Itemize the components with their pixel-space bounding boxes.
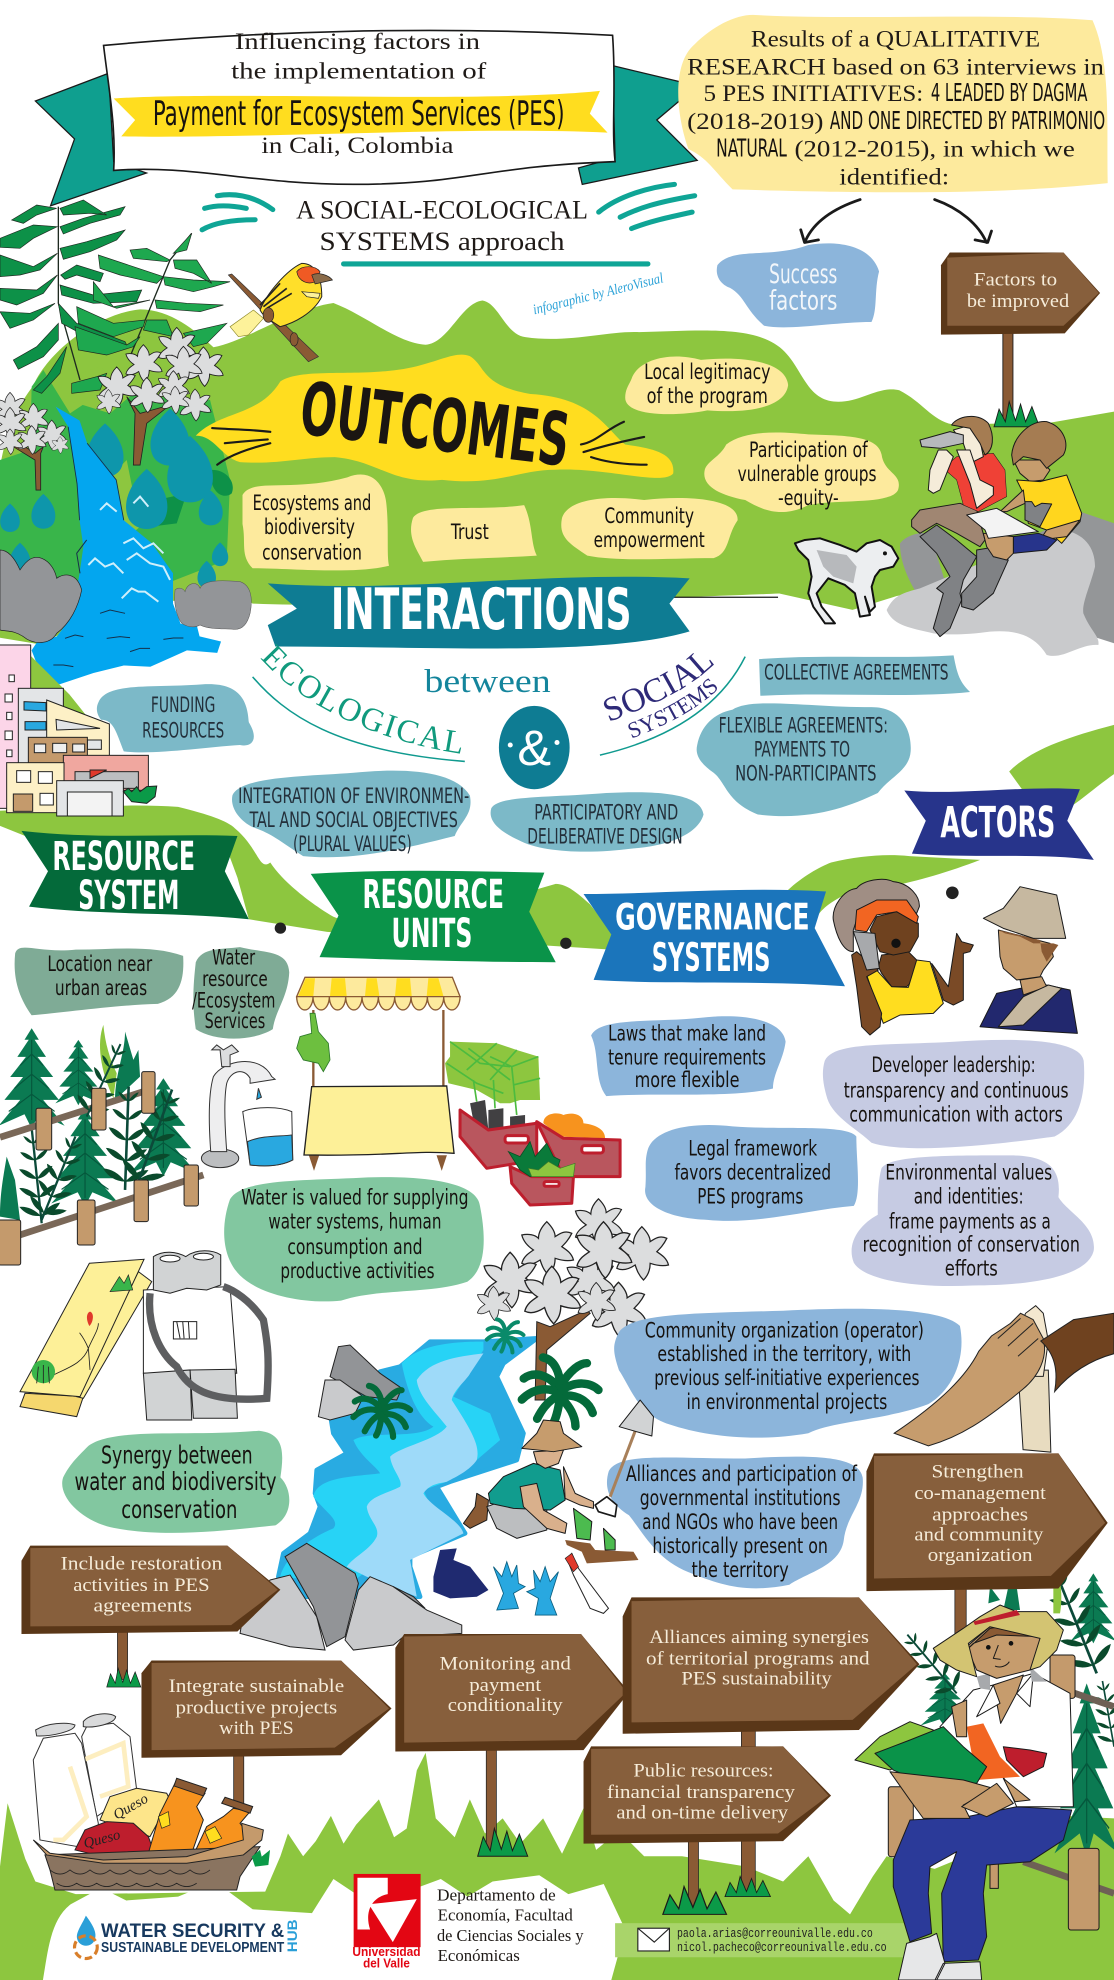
outcome: community empowerment: Community	[604, 504, 694, 529]
outcome: ecosystems: Ecosystems and	[253, 491, 371, 516]
factor: environmental values: frame payments as a	[889, 1210, 1051, 1235]
outcome: participation: Participation of	[749, 438, 869, 463]
waterfall scene: trees, water and rocks	[0, 200, 251, 684]
factor: water resource: resource	[202, 967, 268, 992]
sign: alliances aiming	[623, 1597, 919, 1890]
study description panel: (2012-2015), in which we	[794, 137, 1075, 163]
map	[20, 1259, 152, 1417]
mound behind buildings	[25, 650, 114, 821]
outcomes blob: OUTCOMES	[296, 367, 574, 484]
outcome: trust	[411, 505, 537, 562]
factor: synergy: water and biodiversity	[75, 1467, 277, 1496]
sign: include restoration: activities in PES	[73, 1575, 210, 1596]
factor: legal framework: favors decentralized	[674, 1160, 831, 1185]
interaction: flexible agreements: PAYMENTS TO	[754, 737, 850, 762]
department text: Economía, Facultad	[438, 1906, 573, 1925]
interaction: integration: INTEGRATION OF ENVIRONMEN-	[238, 784, 469, 809]
interaction: funding resources: FUNDING	[151, 693, 215, 718]
outcome: community empowerment	[561, 498, 738, 559]
dark branches	[11, 1037, 193, 1227]
scene: white flowers	[0, 327, 223, 454]
alliances blob: Alliances and participation of	[626, 1462, 858, 1487]
title banner: in Cali, Colombia	[261, 133, 454, 159]
actor: man with hat	[980, 887, 1077, 1033]
child reading	[967, 422, 1082, 560]
trunk	[535, 1310, 590, 1400]
grey hair	[977, 1667, 1047, 1690]
soil and sprouts	[565, 1540, 638, 1563]
sign: public resources: and on-time delivery	[616, 1802, 789, 1823]
rock	[887, 512, 1114, 656]
knife	[565, 1553, 608, 1613]
contact emails: paola.arias@correounivalle.edu.co	[677, 1926, 873, 1941]
factor: water valued: productive activities	[280, 1259, 434, 1284]
study description panel: 5 PES INITIATIVES:	[704, 81, 923, 107]
community organization blob	[614, 1309, 962, 1438]
department text: Económicas	[438, 1946, 520, 1965]
monstera	[353, 1386, 410, 1437]
pants	[893, 1807, 1072, 1962]
sign: alliances aiming: PES sustainability	[681, 1669, 832, 1690]
interaction: funding resources	[97, 684, 254, 752]
factor: legal framework	[645, 1125, 858, 1221]
factor: water valued	[224, 1177, 484, 1301]
study description panel: identified:	[839, 164, 949, 190]
factor: environmental values: Environmental values	[885, 1160, 1052, 1185]
factor: developer leadership	[823, 1040, 1084, 1148]
arrow: to success factors	[801, 200, 860, 242]
factor: environmental values: and identities:	[914, 1184, 1024, 1209]
sign: strengthen: organization	[928, 1545, 1033, 1566]
factor: environmental values: efforts	[945, 1256, 998, 1281]
orange squash and peppers	[967, 1723, 1020, 1780]
sign: strengthen: co-management	[914, 1483, 1047, 1504]
right ferns behind farmer	[894, 1560, 1114, 1858]
face	[967, 1627, 1042, 1678]
contact emails	[615, 1923, 909, 1957]
department text: de Ciencias Sociales y	[437, 1926, 584, 1945]
basket with products	[33, 1714, 270, 1890]
interactions banner: INTERACTIONS	[331, 577, 632, 643]
resource units banner: RESOURCE	[362, 870, 504, 918]
outcome: participation	[704, 432, 899, 512]
study description panel: Results of a QUALITATIVE	[751, 27, 1040, 53]
basket with products: Queso	[82, 1827, 122, 1852]
sign: strengthen: and community	[914, 1525, 1044, 1546]
plant and crates	[445, 1042, 620, 1205]
alliances blob: the territory	[692, 1558, 789, 1583]
alliances blob: historically present on	[652, 1534, 828, 1559]
interaction: participatory: PARTICIPATORY AND	[534, 801, 678, 826]
subtitle swooshes	[202, 184, 695, 230]
shovel	[610, 1427, 637, 1497]
red cheese	[75, 1822, 155, 1857]
yellow cheese	[100, 1788, 170, 1837]
woven basket	[45, 1847, 260, 1890]
success factors blob	[717, 243, 879, 327]
scene: foliage behind waterfall	[0, 367, 233, 588]
actors banner: ACTORS	[940, 798, 1055, 848]
river	[278, 1338, 537, 1597]
sign: strengthen: approaches	[932, 1504, 1028, 1525]
factor: water resource: Services	[205, 1009, 265, 1034]
sign: integrate sustainable: Integrate sustainable	[169, 1676, 344, 1697]
governance systems banner: SYSTEMS	[652, 936, 770, 981]
factor: location: Location near	[47, 952, 152, 977]
hat	[522, 1420, 582, 1452]
community organization blob: in environmental projects	[686, 1390, 887, 1415]
buildings	[0, 645, 157, 816]
ecological label: ECOLOGICAL	[260, 644, 462, 754]
outcome: local legitimacy: Local legitimacy	[644, 360, 770, 385]
outcome: participation: -equity-	[778, 486, 839, 511]
joined hands	[894, 1306, 1114, 1452]
study description panel: RESEARCH based on 63 interviews in	[687, 55, 1104, 81]
factor: laws: more flexible	[635, 1068, 740, 1093]
arm	[952, 1700, 967, 1737]
water security logo	[75, 1916, 300, 1959]
outcome: ecosystems: conservation	[262, 540, 362, 565]
binoculars	[143, 1251, 268, 1420]
subtitle: SYSTEMS approach	[320, 226, 565, 256]
firs	[0, 1028, 197, 1206]
child with binoculars	[912, 416, 1008, 637]
factor: water valued: consumption and	[287, 1235, 422, 1260]
envelope icon	[638, 1928, 669, 1951]
fence with fir trees	[0, 1025, 203, 1265]
scene: fern right	[72, 233, 230, 393]
interaction: flexible agreements	[697, 703, 911, 816]
resource units banner: UNITS	[392, 909, 472, 957]
sign: public resources	[584, 1746, 831, 1914]
banner: right ribbon	[578, 66, 697, 184]
social systems label: SYSTEMS	[628, 678, 717, 738]
study description panel: (2018-2019)	[687, 109, 824, 135]
banner: left ribbon	[35, 73, 147, 206]
trash bag	[433, 1548, 488, 1598]
farmer woman	[855, 1605, 1114, 1980]
community organization blob: previous self-initiative experiences	[654, 1366, 919, 1391]
sign: alliances aiming: of territorial programs and	[646, 1648, 870, 1669]
middle green band	[0, 806, 980, 950]
subtitle: A SOCIAL-ECOLOGICAL	[296, 194, 588, 224]
gardener	[463, 1400, 653, 1563]
factor: laws	[591, 1016, 786, 1096]
factor: water valued: Water is valued for supplying	[241, 1186, 469, 1211]
universidad del valle logo: Universidad	[352, 1944, 421, 1959]
bottles	[33, 1714, 137, 1850]
greens	[855, 1722, 933, 1770]
sign: strengthen	[866, 1453, 1108, 1647]
outcomes blob	[196, 355, 673, 484]
logo clearing	[43, 1875, 625, 1980]
factor: legal framework: Legal framework	[688, 1136, 818, 1161]
community organization blob: established in the territory, with	[657, 1342, 911, 1367]
sign: public resources: Public resources:	[633, 1761, 774, 1782]
outcome: local legitimacy	[625, 356, 788, 414]
factor: location	[15, 948, 183, 1015]
bench and fence	[888, 1655, 1114, 1930]
scene: fern left	[0, 200, 142, 393]
outcome: participation: vulnerable groups	[738, 462, 877, 487]
alliances blob: governmental institutions	[640, 1486, 841, 1511]
subtitle	[202, 184, 695, 266]
scene: waterfall	[32, 407, 221, 684]
resource system banner: RESOURCE	[52, 832, 195, 880]
arrow: to factors to be improved	[935, 200, 991, 242]
resource system banner	[21, 831, 249, 919]
boots	[463, 1493, 488, 1528]
hanging bananas	[297, 1013, 330, 1072]
market stall	[297, 977, 460, 1167]
interactions banner	[268, 577, 690, 649]
water tap and glass	[201, 1045, 293, 1168]
interaction: flexible agreements: FLEXIBLE AGREEMENTS:	[719, 713, 888, 738]
community organization blob: Community organization (operator)	[645, 1318, 924, 1343]
logo drop	[77, 1916, 95, 1946]
actors banner	[904, 788, 1094, 860]
lamb	[795, 538, 898, 623]
outcome: trust: Trust	[450, 520, 489, 545]
universidad del valle logo: del Valle	[363, 1955, 410, 1970]
sign: integrate sustainable: with PES	[219, 1718, 294, 1739]
city block	[0, 645, 31, 808]
shirt	[940, 1673, 1073, 1807]
grass tuft	[994, 402, 1039, 427]
greens in crate	[508, 1142, 560, 1177]
factor: developer leadership: communication with actors	[849, 1102, 1063, 1127]
banner: yellow strip	[114, 91, 608, 137]
universidad del valle logo	[352, 1874, 421, 1970]
governance systems banner	[584, 890, 845, 986]
alliances blob: and NGOs who have been	[642, 1510, 838, 1535]
factor: developer leadership: Developer leadership:	[871, 1053, 1036, 1078]
sign: monitoring: Monitoring and	[440, 1653, 571, 1674]
attribution: infographic by AleroVisual	[531, 270, 665, 318]
outcome: local legitimacy: of the program	[647, 384, 768, 409]
factor: water resource: Water	[212, 946, 255, 971]
outcome: ecosystems	[243, 475, 389, 570]
social systems label	[600, 653, 746, 756]
white flower tree	[477, 1199, 669, 1426]
hat	[933, 1605, 1063, 1677]
rocks group	[240, 1543, 462, 1650]
sign: strengthen: Strengthen	[931, 1461, 1024, 1482]
outcome: community empowerment: empowerment	[594, 528, 705, 553]
basket with products: Queso	[111, 1791, 151, 1823]
factor: water resource	[192, 946, 289, 1039]
blossoms	[575, 1199, 623, 1248]
success factors blob: Success	[769, 259, 837, 290]
scene: tree trunks	[13, 397, 170, 490]
scene: rocks	[0, 550, 251, 643]
interaction: participatory: DELIBERATIVE DESIGN	[527, 825, 683, 850]
resource units banner	[311, 870, 556, 962]
sign: factors to be improved: be improved	[967, 291, 1070, 312]
pins	[275, 886, 959, 949]
interaction: integration: (PLURAL VALUES)	[293, 832, 412, 857]
sign: integrate sustainable	[141, 1661, 392, 1810]
study description panel	[678, 15, 1108, 192]
sign: alliances aiming: Alliances aiming synergies	[649, 1627, 869, 1648]
water security logo: SUSTAINABLE DEVELOPMENT	[101, 1940, 284, 1956]
alliances blob	[607, 1457, 863, 1588]
ampersand circle: &	[517, 719, 551, 776]
paper bag	[890, 1772, 993, 1818]
potted plant	[445, 1042, 540, 1130]
factor: synergy	[62, 1431, 289, 1533]
sign: factors to be improved: Factors to	[974, 269, 1057, 290]
factor: laws: Laws that make land	[608, 1022, 766, 1047]
factor: water valued: water systems, human	[268, 1210, 441, 1235]
small rock	[318, 1345, 402, 1420]
interaction: funding resources: RESOURCES	[142, 718, 224, 743]
water security logo: HUB	[284, 1919, 300, 1952]
upper right green band	[1009, 725, 1114, 814]
sign: monitoring: payment	[469, 1675, 542, 1696]
sign: integrate sustainable: productive projects	[176, 1698, 337, 1719]
actor: woman on phone	[833, 879, 973, 1035]
oranges	[543, 1113, 605, 1138]
fence posts	[0, 1072, 198, 1265]
factor: laws: tenure requirements	[608, 1046, 766, 1071]
bird on branch	[228, 263, 332, 362]
sign: include restoration	[21, 1546, 280, 1687]
water security logo: WATER SECURITY &	[101, 1920, 284, 1942]
factor: environmental values	[852, 1155, 1094, 1286]
fence rails	[0, 1092, 203, 1235]
torso	[488, 1463, 565, 1510]
title banner	[35, 29, 697, 206]
contact emails: nicol.pacheco@correounivalle.edu.co	[677, 1940, 887, 1955]
interaction: integration: TAL AND SOCIAL OBJECTIVES	[249, 808, 458, 833]
sign: public resources: financial transparency	[607, 1782, 796, 1803]
red crates	[460, 1110, 620, 1205]
sign: monitoring: conditionality	[448, 1695, 563, 1716]
title lines: Influencing factors in	[235, 29, 480, 55]
study description panel: NATURAL	[716, 134, 787, 163]
interaction: flexible agreements: NON-PARTICIPANTS	[735, 761, 877, 786]
interaction: participatory	[491, 792, 704, 852]
resource system banner: SYSTEM	[78, 871, 179, 919]
tall blades	[100, 1025, 117, 1098]
outcome: ecosystems: biodiversity	[264, 515, 355, 540]
factor: synergy: conservation	[121, 1495, 237, 1524]
title banner: the implementation of	[231, 58, 487, 84]
between label: between	[424, 664, 551, 700]
lower grass field	[0, 1753, 1114, 1980]
children on a rock	[887, 416, 1114, 656]
governance systems banner: GOVERNANCE	[615, 895, 810, 938]
upper green hill	[0, 301, 1114, 644]
sign: factors to be improved	[941, 253, 1100, 422]
main title: Payment for Ecosystem Services (PES)	[153, 94, 565, 134]
social systems label: SOCIAL	[604, 653, 714, 721]
department text	[437, 1885, 584, 1965]
factor: legal framework: PES programs	[697, 1184, 803, 1209]
shoes	[898, 1933, 982, 1980]
sign: include restoration: Include restoration	[61, 1554, 223, 1575]
factor: synergy: Synergy between	[101, 1441, 253, 1470]
department text: Departamento de	[437, 1885, 556, 1904]
banner: white panel	[104, 30, 615, 184]
success factors blob: factors	[769, 285, 837, 316]
factor: water resource: /Ecosystem	[192, 989, 275, 1014]
gloves	[493, 1562, 558, 1615]
skirt	[487, 1498, 547, 1538]
interaction: collective agreements: COLLECTIVE AGREEMENTS	[764, 660, 949, 685]
interaction: integration	[232, 771, 471, 857]
sign: include restoration: agreements	[93, 1595, 192, 1616]
interaction: collective agreements	[759, 655, 970, 696]
tree leaves	[487, 1319, 523, 1352]
sign: monitoring	[395, 1634, 629, 1856]
ampersand circle	[499, 706, 570, 789]
honey jars	[148, 1783, 205, 1853]
factor: location: urban areas	[55, 976, 147, 1001]
